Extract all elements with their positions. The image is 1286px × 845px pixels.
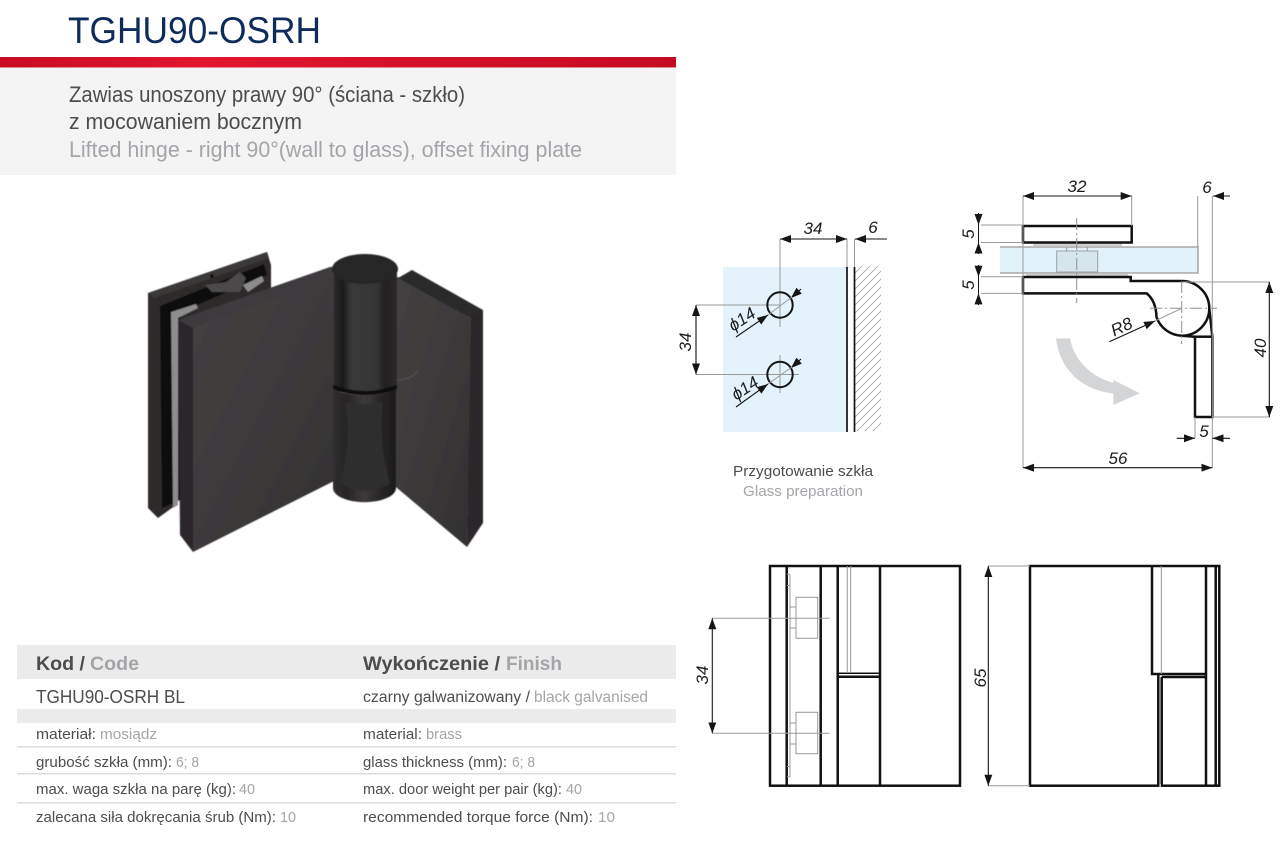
English specifications [363, 726, 615, 826]
drawing: top section view: 40 [1251, 338, 1270, 357]
drawing: top section view: 5 [959, 280, 978, 290]
drawing: front elevation with screw positions: 34 [693, 666, 712, 684]
drawing: top section view: 56 [1109, 449, 1128, 468]
drawing: front elevation with screw positions [693, 566, 960, 786]
product code and finish row: TGHU90-OSRH BL [36, 687, 185, 707]
drawing: top section view: 32 [1068, 177, 1087, 196]
Polish specifications: mosiądz [100, 726, 157, 743]
English specifications: 10 [598, 809, 615, 826]
panel: product description: Lifted hinge - right 90°(wall to glass), offset fixing plate [69, 137, 582, 162]
drawing: side elevation: 65 [971, 668, 990, 687]
caption: glass preparation: Przygotowanie szkła [733, 463, 874, 480]
product photo: black hinge [148, 252, 483, 552]
table header: Wykończenie / [363, 654, 501, 675]
caption: glass preparation: Glass preparation [743, 483, 863, 500]
drawing: glass preparation: 34 [676, 333, 695, 351]
English specifications: 40 [566, 781, 582, 798]
panel: product description [0, 68, 676, 175]
drawing: top section view: 5 [959, 229, 978, 239]
table header: Finish [506, 654, 562, 675]
drawing: top section view [959, 177, 1270, 468]
Polish specifications: zalecana siła dokręcania śrub (Nm): [36, 809, 276, 826]
caption: glass preparation [733, 463, 874, 500]
rotation arrow [1056, 338, 1140, 405]
drawing: glass preparation: ϕ14 [725, 304, 759, 335]
Polish specifications: materiał: [36, 726, 96, 743]
English specifications: material: [363, 726, 422, 743]
drawing: glass preparation [676, 218, 887, 432]
Polish specifications: 10 [280, 809, 296, 826]
panel: product description: Zawias unoszony prawy 90° (ściana - szkło) [69, 82, 465, 107]
Polish specifications: grubość szkła (mm): [36, 754, 172, 771]
panel: product description: z mocowaniem bocznym [69, 109, 302, 134]
Polish specifications [36, 726, 296, 826]
table header [17, 645, 676, 679]
Polish specifications: 40 [239, 781, 255, 798]
drawing: side elevation [971, 566, 1219, 787]
product code and finish row: czarny galwanizowany / [363, 689, 531, 706]
drawing: top section view: R8 [1108, 314, 1136, 340]
title: TGHU90-OSRH [68, 10, 321, 51]
drawing: glass preparation: ϕ14 [728, 373, 762, 404]
product code and finish row: black galvanised [534, 689, 648, 706]
Polish specifications: 6; 8 [176, 754, 199, 771]
English specifications: 6; 8 [512, 754, 535, 771]
drawing: top section view: 6 [1202, 178, 1212, 197]
Polish specifications: max. waga szkła na parę (kg): [36, 781, 236, 798]
drawing: glass preparation: 6 [868, 218, 878, 237]
product code and finish row [36, 687, 648, 707]
table header: Code [90, 654, 139, 675]
English specifications: max. door weight per pair (kg): [363, 781, 562, 798]
English specifications: recommended torque force (Nm): [363, 809, 593, 826]
red title bar [0, 57, 676, 68]
drawing: glass preparation: 34 [804, 219, 822, 238]
table header: Kod / [36, 654, 86, 675]
drawing: top section view: 5 [1199, 422, 1209, 441]
table: specifications [17, 645, 676, 826]
English specifications: brass [426, 726, 462, 743]
English specifications: glass thickness (mm): [363, 754, 507, 771]
